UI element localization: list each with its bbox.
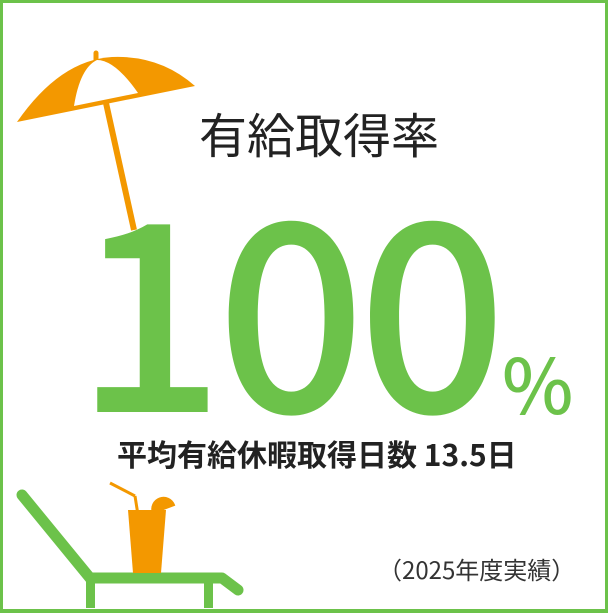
title: 有給取得率 bbox=[199, 97, 439, 167]
percent sign: % bbox=[502, 326, 573, 436]
big number: 100 bbox=[75, 109, 499, 488]
note: （2025年度実績） bbox=[378, 551, 575, 586]
subtitle: 平均有給休暇取得日数 13.5日 bbox=[117, 431, 517, 475]
